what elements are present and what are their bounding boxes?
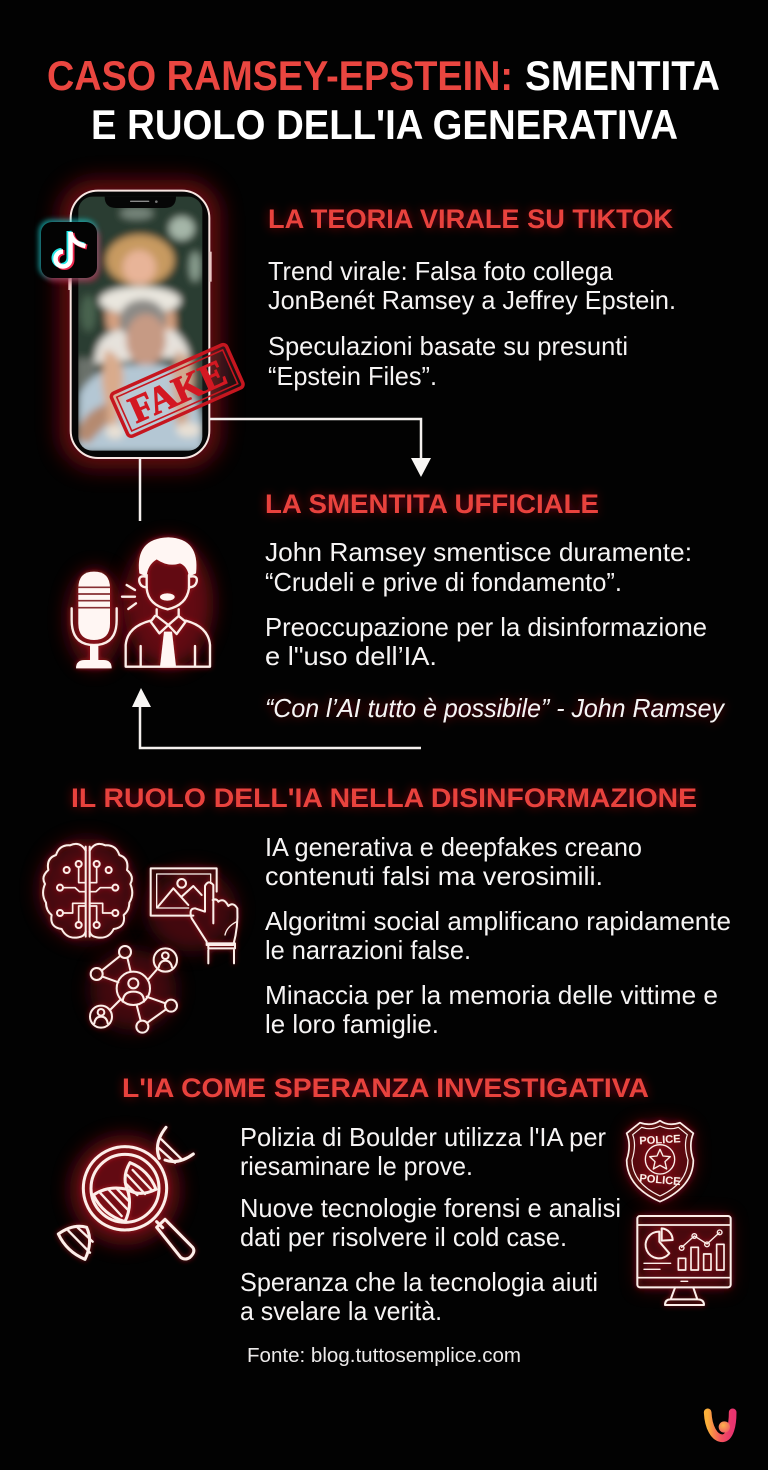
brain	[43, 844, 132, 938]
text block: ruolo dell'IA	[265, 832, 731, 1039]
icon: phone with fake photo	[59, 180, 221, 468]
icon: tiktok	[39, 220, 100, 282]
text block: ruolo dell'IA: IA generativa e deepfakes creano	[265, 832, 642, 862]
quote: “Con l’AI tutto è possibile” - John Ramsey	[265, 693, 726, 723]
text block: speranza investigativa: dati per risolvere il cold case.	[240, 1222, 567, 1252]
text block: smentita: Preoccupazione per la disinformazione	[265, 612, 707, 642]
icons: brain, touch image, network	[38, 838, 237, 1033]
title: SMENTITA	[525, 52, 720, 99]
text block: ruolo dell'IA: le narrazioni false.	[265, 935, 471, 965]
text block: ruolo dell'IA: Algoritmi social amplificano rapidamente	[265, 906, 731, 936]
icon: microphone and speaker	[67, 537, 213, 668]
text block: smentita	[265, 537, 707, 671]
connector: phone to speaker	[139, 459, 141, 521]
text block: teoria virale: JonBenét Ramsey a Jeffrey Epstein.	[268, 285, 676, 315]
touch image	[151, 868, 237, 963]
arrow: smentita to speaker	[132, 688, 421, 748]
section heading: smentita: LA SMENTITA UFFICIALE	[265, 489, 599, 519]
text block: ruolo dell'IA: le loro famiglie.	[265, 1009, 439, 1039]
text block: teoria virale: Speculazioni basate su presunti	[268, 331, 628, 361]
text block: speranza investigativa: Speranza che la tecnologia aiuti	[240, 1267, 598, 1297]
text block: speranza investigativa: riesaminare le prove.	[240, 1151, 473, 1181]
icon: dna under magnifier	[58, 1127, 194, 1259]
text block: teoria virale: “Epstein Files”.	[268, 361, 437, 391]
text block: ruolo dell'IA: contenuti falsi ma verosimili.	[265, 861, 603, 891]
text block: smentita: John Ramsey smentisce duramente:	[265, 537, 692, 567]
icon: fake stamp	[110, 343, 244, 438]
section heading: teoria virale: LA TEORIA VIRALE SU TIKTOK	[268, 204, 673, 234]
section heading: speranza investigativa: L'IA COME SPERANZA INVESTIGATIVA	[122, 1073, 649, 1103]
icon: police badge: POLICE	[639, 1173, 681, 1188]
icon: analytics monitor	[637, 1216, 731, 1305]
title: E RUOLO DELL'IA GENERATIVA	[91, 101, 678, 148]
title	[47, 52, 720, 148]
icon: fake stamp: FAKE	[123, 352, 233, 432]
source note: Fonte: blog.tuttosemplice.com	[247, 1345, 521, 1367]
text block: teoria virale: Trend virale: Falsa foto collega	[268, 256, 614, 286]
notch	[105, 197, 176, 208]
icon: police badge	[627, 1121, 693, 1202]
text block: teoria virale	[268, 256, 676, 391]
logo	[708, 1412, 733, 1438]
text block: smentita: “Crudeli e prive di fondamento”.	[265, 567, 622, 597]
text block: speranza investigativa: Polizia di Boulder utilizza l'IA per	[240, 1122, 606, 1152]
text block: smentita: e l"uso dell’IA.	[265, 641, 437, 671]
arrow: phone to smentita	[210, 419, 431, 477]
icon: police badge: POLICE	[639, 1133, 681, 1147]
section heading: ruolo dell'IA: IL RUOLO DELL'IA NELLA DISINFORMAZIONE	[71, 783, 697, 813]
text block: speranza investigativa: Nuove tecnologie forensi e analisi	[240, 1193, 621, 1223]
photo	[78, 196, 202, 451]
text block: speranza investigativa: a svelare la verità.	[240, 1296, 442, 1326]
title: CASO RAMSEY-EPSTEIN:	[47, 52, 513, 99]
text block: speranza investigativa	[240, 1122, 621, 1326]
network	[90, 946, 177, 1033]
text block: ruolo dell'IA: Minaccia per la memoria delle vittime e	[265, 980, 718, 1010]
